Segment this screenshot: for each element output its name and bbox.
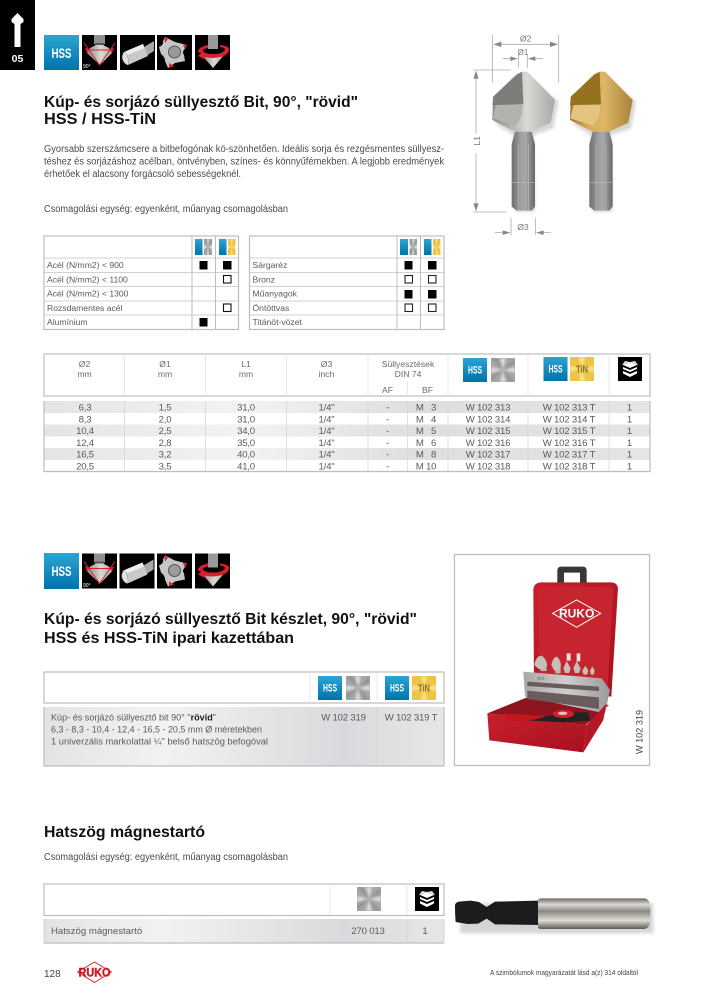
feature icons row 1 [44,35,230,70]
dimension Ø2: Ø2 [520,34,532,44]
table header: Ø2 [79,359,90,369]
row 5: - [386,450,389,461]
title: Kúp- és sorjázó süllyesztő Bit, 90°, "rövid" [44,94,358,111]
material labels: Sárgaréz [252,260,287,270]
row 4 [76,438,632,449]
row 3: - [386,426,389,437]
table header: mm [77,369,92,379]
row 6: - [386,461,389,472]
description text: téshez és sorjázáshoz acélban, öntvényben, színes- és könnyűfémekben. A legjobb eredmények [44,156,444,168]
title: set [44,611,417,647]
title: set: Kúp- és sorjázó süllyesztő Bit készlet, 90°, "rövid" [44,611,417,628]
row 4: - [386,438,389,449]
title: set: HSS és HSS-TiN ipari kazettában [44,630,294,647]
row 2: 1 [627,414,632,425]
icon: rotation [195,554,230,588]
row 2: W 102 314 [466,414,511,425]
row 1: W 102 313 T [543,402,596,414]
steel sleeve [538,898,650,929]
material labels: Acél (N/mm2) < 1300 [47,288,129,298]
RUKO logo on lid [553,600,601,627]
row 6: W 102 318 T [543,461,596,472]
row 3: W 102 315 T [543,426,596,437]
dimension Ø3: Ø3 [517,222,529,232]
packaging note: Csomagolási egység: egyenként, műanyag csomagolásban [44,852,288,863]
polished finish icon [491,358,515,382]
material icon pair TiN [424,239,440,255]
dimension Ø1: Ø1 [518,48,529,57]
HSS icon: HSS [468,364,482,376]
icon: countersink bit [12,13,24,47]
row 5: 1/4" [319,450,334,461]
row 1 [79,402,632,414]
row 5 [76,450,632,461]
photo: magnetic bit holder [455,898,653,933]
table header [44,354,650,396]
bit holder block [523,653,610,713]
table header: DIN 74 [395,369,422,379]
dimension L1 [472,70,511,212]
table: other materials [250,236,444,330]
row 4: M 6 [416,438,436,449]
row 3: 34,0 [237,426,255,437]
row 5: W 102 317 [466,450,510,461]
row 6: 41,0 [237,461,255,472]
row 6: 1 [627,461,632,472]
material labels [252,260,302,327]
table header: mm [158,369,172,379]
holder shadow [460,903,653,933]
icon: 90 degree cone: 90° [83,64,91,70]
body: 1 [422,926,428,937]
row 5: 3,2 [159,450,171,461]
icon: rotation [195,35,230,70]
material icon pair TiN [219,239,236,255]
row 5: 16,5 [76,450,94,461]
suitability markers [200,261,232,326]
body: W 102 319 T [385,712,438,724]
holder order table [44,884,444,943]
row 2: 1/4" [319,414,334,425]
material labels [47,260,129,327]
header [44,672,444,703]
row 6 [76,461,632,472]
drawing: countersink bits with dimensions [472,34,636,235]
table body [44,401,650,472]
material labels: Alumínium [47,317,88,327]
article number vertical: W 102 319 [634,710,644,754]
body: Kúp- és sorjázó süllyesztő bit 90° "rövid" [51,712,216,724]
packaging icon [415,887,439,911]
icon: three flutes [157,35,192,70]
material labels: Titánöt-vözet [252,317,302,327]
body: Hatszög mágnestartó [51,926,142,937]
material labels: Öntöttvas [252,303,289,313]
row 1: W 102 313 [466,402,510,414]
HSS icon [385,676,409,700]
icon text: HSS: HSS [52,45,72,61]
dimension Ø2 [492,34,559,82]
description text [44,144,444,180]
icon: 90 degree cone [82,35,117,70]
icon: hex shank [120,554,154,588]
dimension Ø3 [495,218,551,235]
body: 1 univerzális markolattal ¼" belső hatszög befogóval [51,736,268,748]
row 2: W 102 314 T [543,414,596,425]
feature icons row 2 [44,553,230,589]
row 2: 8,3 [79,414,91,425]
table header: Ø1 [159,359,171,369]
bit shadows [497,75,636,212]
tray interior [487,697,609,725]
row 4: 1 [627,438,632,449]
table header: BF [422,385,433,395]
row 4: W 102 316 T [543,438,596,449]
suitability markers [404,261,436,312]
icon: hex shank [120,35,155,70]
title: HSS / HSS-TiN [44,111,156,128]
row 4: 1/4" [319,438,334,449]
material labels: Acél (N/mm2) < 1100 [47,274,128,284]
page number: 128 [44,969,61,980]
row 1: 1 [627,402,632,414]
HSS icon: HSS [390,682,404,694]
row 5: M 8 [416,450,436,461]
silver bit [492,72,555,211]
row 4: W 102 316 [466,438,510,449]
body: 270 013 [351,926,385,937]
row 2: M 4 [416,414,437,425]
row 4: 2,8 [159,438,171,449]
header [44,884,444,916]
chapter number: 05 [12,53,23,65]
hex tip [455,901,538,925]
row 6: 3,5 [159,461,171,472]
material labels: Műanyagok [252,288,298,298]
row 3: M 5 [416,426,436,437]
row 5: 1 [627,450,632,461]
body [44,707,444,766]
TiN icon [570,357,594,381]
body: 6,3 - 8,3 - 10,4 - 12,4 - 16,5 - 20,5 mm Ø méretekben [51,724,262,736]
icon: 90 degree cone [82,554,117,589]
row 1: 1/4" [319,402,334,414]
table header: AF [382,385,393,395]
polished finish icon [346,676,370,700]
description text: Gyorsabb szerszámcsere a bitbefogónak kö-szönhetően. Ideális sorja és rezgésmentes süllyesz- [44,144,444,155]
row 1: - [386,402,389,414]
row 4: 12,4 [76,438,95,449]
row 5: 40,0 [237,450,255,461]
bit holder block: 20,5 [537,676,544,680]
row 3: 2,5 [159,426,171,437]
dimension L1: L1 [472,136,482,146]
material labels: Rozsdamentes acél [47,303,123,313]
description text: érhetőek el alacsony forgácsoló sebességeknél. [44,169,241,180]
row 5: W 102 317 T [543,450,596,461]
gold bit [570,72,633,211]
row 3: 1/4" [319,426,334,437]
material labels: Bronz [252,274,275,284]
body [44,919,444,943]
HSS icon: HSS [323,682,337,694]
row 6: 20,5 [76,461,94,472]
row 4: 35,0 [237,438,255,449]
packaging note: Csomagolási egység: egyenként, műanyag csomagolásban [44,204,288,215]
material icon pair HSS [195,239,212,255]
row 1: 6,3 [79,402,91,414]
table header: mm [239,369,253,379]
table header: inch [319,369,335,379]
row 2: - [386,414,389,425]
polished finish icon [357,887,381,911]
row 6: M 10 [416,461,436,472]
row 3 [76,426,632,437]
icon text: HSS: HSS [52,563,72,579]
row 3: W 102 315 [466,426,510,437]
TiN icon: TiN [418,684,430,694]
icon: three flutes [157,554,192,588]
table header: L1 [241,359,251,369]
row 2: 31,0 [237,414,255,425]
set order table [44,672,444,766]
RUKO logo: RUKO [78,966,110,980]
icon: 90 degree cone: 90° [83,583,91,589]
case tray [487,713,587,752]
HSS icon: HSS [548,364,562,376]
case lid [533,582,618,697]
packaging icon [618,357,642,381]
handle [503,710,590,722]
TiN icon: TiN [576,364,588,376]
table header: Ø3 [321,359,332,369]
HSS icon [318,676,342,700]
title: magnetic holder: Hatszög mágnestartó [44,824,205,841]
body: W 102 319 [321,712,366,724]
material icon pair HSS [400,239,417,255]
HSS icon [463,358,487,382]
row 1: 31,0 [237,402,255,414]
RUKO logo [78,962,112,982]
case hanger [557,567,587,583]
table: steel and aluminium materials [44,236,238,330]
material labels: Acél (N/mm2) < 900 [47,260,124,270]
row 6: W 102 318 [466,461,510,472]
main specification table [44,354,650,472]
row 3: 1 [627,426,632,437]
HSS icon [544,357,568,381]
row 2 [79,414,632,425]
row 6: 1/4" [319,461,334,472]
row 1: 1,5 [159,402,171,414]
row 2: 2,0 [159,414,171,425]
TiN icon [412,676,436,700]
RUKO logo on lid: RUKO [559,607,594,621]
photo panel: red metal case set [454,554,650,766]
row 3: 10,4 [76,426,95,437]
title [44,94,358,128]
dimension Ø1 [503,48,543,68]
row 1: M 3 [416,402,436,414]
chapter tab [0,0,35,70]
table header: Süllyesztések [382,359,435,369]
footer reference note: A szimbólumok magyarázatát lásd a(z) 314 oldaltól [490,968,638,977]
